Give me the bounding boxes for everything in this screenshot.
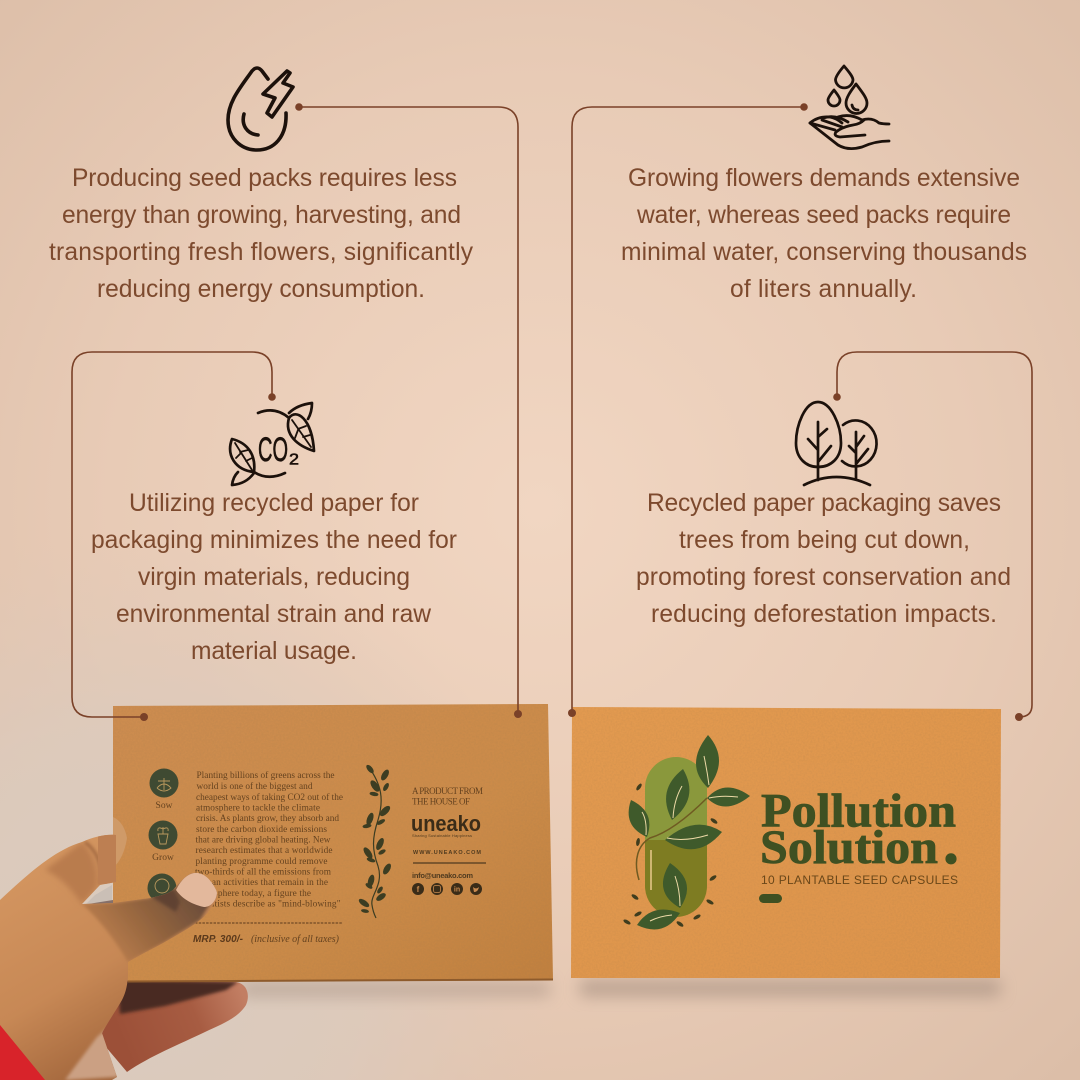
- small capsule pill: [759, 894, 782, 903]
- product title: [760, 784, 959, 877]
- text block: water: [621, 165, 1027, 303]
- icon: trees: [796, 402, 877, 485]
- brand block: info@uneako.com: [412, 871, 473, 880]
- text block: water: of liters annually.: [730, 276, 917, 303]
- product subtitle: 10 PLANTABLE SEED CAPSULES: [761, 873, 958, 887]
- text block: water: Growing flowers demands extensive: [628, 165, 1020, 192]
- step icon: grow: [148, 820, 178, 863]
- text block: water: minimal water, conserving thousands: [621, 239, 1027, 266]
- text block: energy: [49, 165, 474, 303]
- red sleeve: [0, 1025, 45, 1080]
- brand block: Sharing Sustainable Happiness: [412, 833, 472, 838]
- text block: energy: reducing energy consumption.: [97, 276, 425, 303]
- thumb nail: [176, 873, 217, 907]
- brand block: A PRODUCT FROM: [412, 786, 483, 796]
- icon: CO2 with leaves: CO: [258, 431, 288, 469]
- pack description text: cheapest ways of taking CO2 out of the: [196, 792, 343, 803]
- pack description text: two-thirds of all the emissions from: [195, 866, 332, 878]
- hand: lower fingers behind pack: [85, 885, 248, 1072]
- text block: recycled paper: Utilizing recycled paper for: [129, 490, 419, 517]
- vine illustration: [357, 764, 393, 918]
- price: [193, 934, 340, 945]
- package: front of seed pack: [570, 705, 1002, 979]
- text block: trees: promoting forest conservation and: [636, 564, 1011, 591]
- finger crease: [85, 842, 101, 884]
- text block: trees: trees from being cut down,: [679, 527, 970, 554]
- pack description text: crisis. As plants grow, they absorb and: [196, 814, 339, 824]
- palm lower side: [64, 1028, 117, 1080]
- hand silhouette: [0, 830, 225, 1080]
- text block: recycled paper: virgin materials, reducing: [138, 564, 410, 591]
- pack description text: research estimates that a worldwide: [196, 846, 332, 856]
- index finger shading: [45, 842, 97, 904]
- icon: CO2 with leaves: [230, 403, 314, 485]
- brand block: THE HOUSE OF: [412, 796, 470, 806]
- text block: recycled paper: environmental strain and raw: [116, 601, 431, 628]
- step icon: grow: Grow: [152, 853, 174, 863]
- step icon: sow: Sow: [156, 801, 173, 811]
- index fingertip tone: [98, 834, 116, 884]
- step icon: third step: [148, 874, 176, 902]
- connector: water to front pack: [568, 103, 808, 717]
- connector: CO2 to back pack: [72, 352, 276, 721]
- product title: Solution: [760, 821, 938, 874]
- text block: energy: transporting fresh flowers, significantly: [49, 239, 474, 266]
- package: back of seed pack: [113, 704, 553, 982]
- pack body: [571, 707, 1001, 978]
- brand block: WWW.UNEAKO.COM: [413, 850, 481, 856]
- pack description text: atmosphere today, a figure the: [195, 888, 311, 899]
- pack description text: world is one of the biggest and: [196, 781, 313, 792]
- step icon: sow: [150, 768, 178, 811]
- icon: CO2 with leaves: 2: [289, 452, 299, 468]
- text block: trees: [636, 490, 1011, 628]
- text block: water: water, whereas seed packs require: [636, 202, 1011, 229]
- pack flap notch: [113, 817, 127, 868]
- text block: energy: energy than growing, harvesting, and: [62, 202, 461, 229]
- text block: trees: Recycled paper packaging saves: [647, 490, 1001, 517]
- pack description text: human activities that remain in the: [195, 878, 328, 888]
- dashed divider: [195, 922, 342, 924]
- thumb top shadow: [150, 888, 180, 912]
- brand block: uneako: [411, 811, 481, 836]
- text block: recycled paper: [91, 490, 457, 665]
- pack description text: [194, 770, 343, 910]
- social icons: [412, 883, 482, 895]
- logo: capsule with leaves: [623, 735, 750, 929]
- connector: trees to front pack: [833, 352, 1032, 721]
- pack description text: store the carbon dioxide emissions: [196, 825, 327, 835]
- price: (inclusive of all taxes): [251, 934, 340, 945]
- text block: energy: Producing seed packs requires less: [72, 165, 457, 192]
- pack description text: Planting billions of greens across the: [196, 770, 334, 781]
- text block: trees: reducing deforestation impacts.: [651, 601, 997, 628]
- icon: water drops over hand: [810, 66, 889, 149]
- price: MRP. 300/-: [193, 934, 244, 945]
- icon: water drop with lightning bolt: [228, 68, 293, 150]
- pack description text: scientists describe as "mind-blowing": [194, 900, 341, 910]
- pack description text: atmosphere to tackle the climate: [196, 804, 320, 814]
- product title: Pollution: [761, 784, 956, 838]
- connector: energy to back pack: [295, 103, 522, 718]
- social icons: in: [454, 886, 460, 894]
- thumb: [82, 873, 217, 962]
- pack body: [113, 704, 553, 982]
- social icons: f: [417, 885, 420, 894]
- hand: palm, index finger and thumb: [0, 830, 225, 1080]
- pack description text: that are driving global heating. New: [196, 836, 331, 846]
- pack description text: planting programme could remove: [196, 857, 328, 867]
- text block: recycled paper: material usage.: [191, 638, 357, 665]
- product title: .: [943, 806, 959, 877]
- brand block: [411, 786, 486, 880]
- text block: recycled paper: packaging minimizes the need for: [91, 527, 457, 554]
